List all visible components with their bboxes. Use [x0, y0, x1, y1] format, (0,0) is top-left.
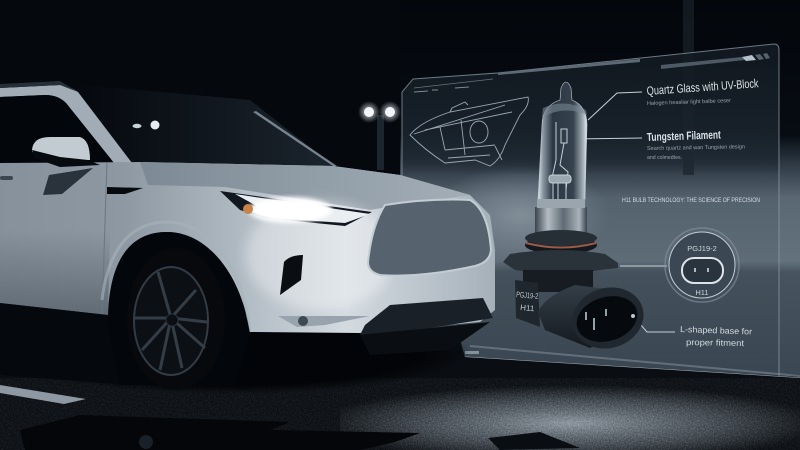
fog lamp — [278, 316, 370, 327]
street lamps — [358, 101, 401, 170]
grille — [368, 200, 491, 276]
door handle — [0, 176, 13, 180]
neck — [523, 270, 593, 292]
socket diagram — [665, 228, 739, 302]
roof and pillar — [0, 85, 132, 163]
puddle — [20, 415, 580, 450]
mirror shadow — [43, 168, 93, 195]
fender arch highlight — [102, 222, 250, 332]
body shell — [0, 162, 495, 333]
label: l-shaped base — [680, 324, 752, 348]
road surface — [0, 340, 800, 450]
socket diagram: H11 — [695, 288, 709, 297]
label: tungsten filament: Search quartz and wan Tungsten design — [647, 144, 745, 152]
label: quartz glass: Quartz Glass with UV-Block — [646, 76, 760, 98]
label: l-shaped base: L-shaped base for — [680, 324, 752, 337]
label: tungsten filament: and colmedtes. — [647, 155, 682, 161]
side intake — [280, 255, 303, 295]
collar — [525, 236, 597, 254]
metal base — [535, 207, 587, 233]
base label block — [515, 280, 540, 327]
wheel — [108, 232, 250, 390]
label: tungsten filament: Tungsten Filament — [647, 129, 721, 144]
bulb glass — [538, 82, 587, 200]
headlight blueprint — [410, 97, 528, 166]
base label block: H11 — [520, 303, 535, 313]
filament — [549, 122, 571, 200]
panel heading: H11 BULB TECHNOLOGY: THE SCIENCE OF PRECISION — [622, 197, 760, 204]
mirror — [32, 137, 90, 160]
car shadow — [0, 310, 470, 394]
flange — [503, 250, 618, 276]
socket diagram: PGJ19-2 — [687, 244, 717, 253]
lower dark intake — [360, 298, 493, 335]
holographic panel — [402, 44, 800, 378]
windshield — [60, 83, 335, 167]
label: tungsten filament — [647, 129, 745, 161]
car — [0, 81, 495, 390]
door seam — [102, 162, 107, 315]
hood — [140, 162, 470, 210]
bulb — [503, 82, 651, 357]
connector — [538, 285, 640, 348]
side window — [0, 95, 114, 164]
base label block: PGJ19-2 — [516, 290, 539, 301]
label: l-shaped base: proper fitment — [686, 337, 745, 348]
headlight — [220, 191, 372, 226]
fender vent — [107, 187, 143, 194]
lane marking — [0, 385, 86, 404]
callout lines — [572, 92, 675, 332]
label: quartz glass — [646, 76, 760, 107]
label: quartz glass: Halogen heasliar light balbe ceser — [647, 98, 731, 107]
